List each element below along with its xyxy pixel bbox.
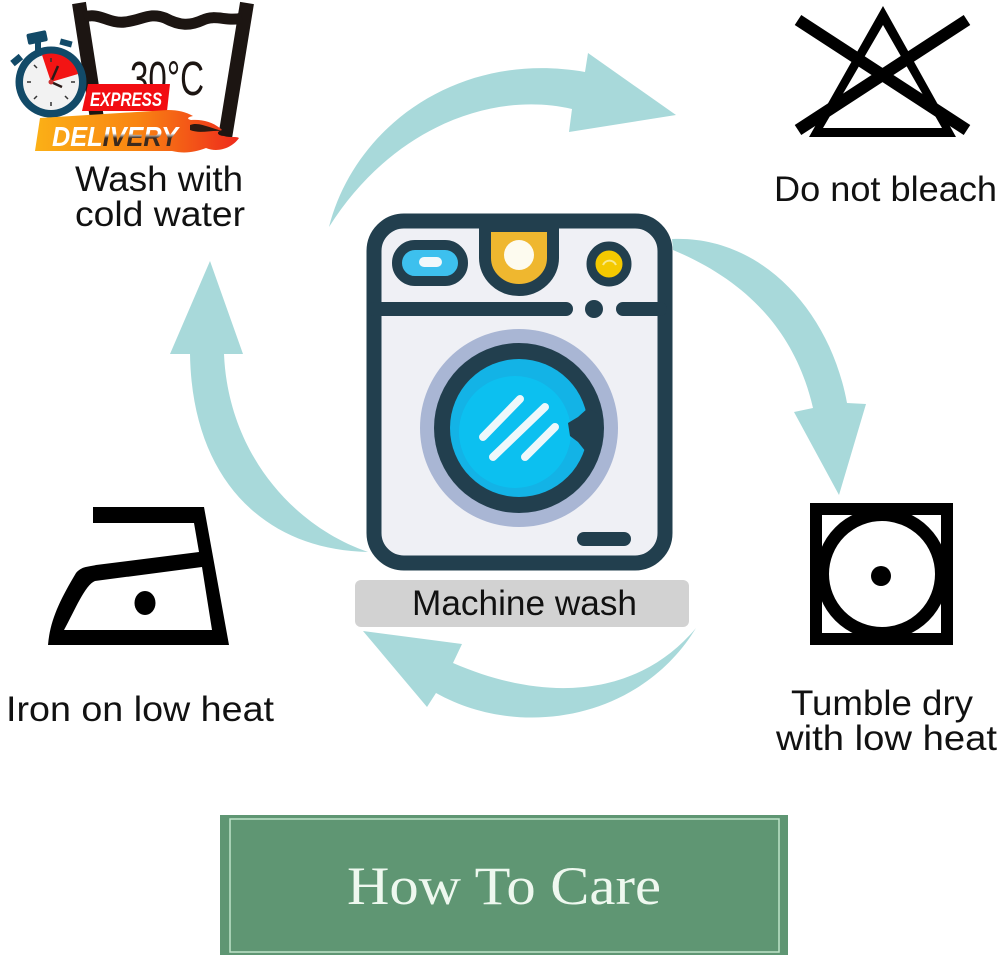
label: tumble dry with low heat: with low heat — [775, 719, 997, 758]
label: wash with cold water: cold water — [75, 195, 245, 234]
banner: how to care — [220, 815, 788, 955]
yellow dial — [485, 226, 553, 290]
arrow: left, iron to wash — [170, 261, 368, 552]
drum door — [420, 329, 618, 527]
express ribbon: EXPRESS — [90, 90, 162, 111]
label: tumble dry with low heat: Tumble dry — [791, 684, 974, 723]
washing machine — [374, 221, 665, 563]
door glare — [483, 399, 555, 457]
arrow: top, wash to bleach — [329, 53, 676, 227]
icon: do not bleach — [798, 6, 967, 137]
label: machine wash: Machine wash — [412, 584, 637, 623]
icon: wash tub 30 degrees — [79, 3, 247, 138]
clock — [10, 30, 86, 118]
banner: how to care: How To Care — [347, 856, 661, 916]
temperature text: 30°C — [130, 53, 204, 106]
delivery ribbon with flames — [35, 110, 239, 152]
bottom slot — [577, 532, 631, 546]
label: tumble dry with low heat — [775, 684, 997, 758]
control panel divider — [374, 302, 660, 316]
badge: express delivery — [10, 30, 239, 152]
clock ticks — [27, 58, 75, 106]
knob — [591, 246, 627, 282]
label: machine wash — [355, 580, 689, 627]
express ribbon — [82, 84, 170, 111]
arrow: right, bleach to tumble dry — [672, 239, 866, 495]
delivery ribbon with flames: DELIVERY — [52, 121, 180, 152]
label: do not bleach: Do not bleach — [774, 170, 997, 209]
detergent pill — [397, 245, 463, 281]
icon: tumble dry — [816, 509, 947, 639]
label: wash with cold water — [75, 160, 245, 234]
arrow: bottom, tumble dry to iron — [363, 628, 696, 718]
icon: iron low heat — [48, 507, 229, 645]
label: iron on low heat: Iron on low heat — [6, 690, 274, 729]
red sector — [42, 54, 78, 82]
label: wash with cold water: Wash with — [75, 160, 243, 199]
